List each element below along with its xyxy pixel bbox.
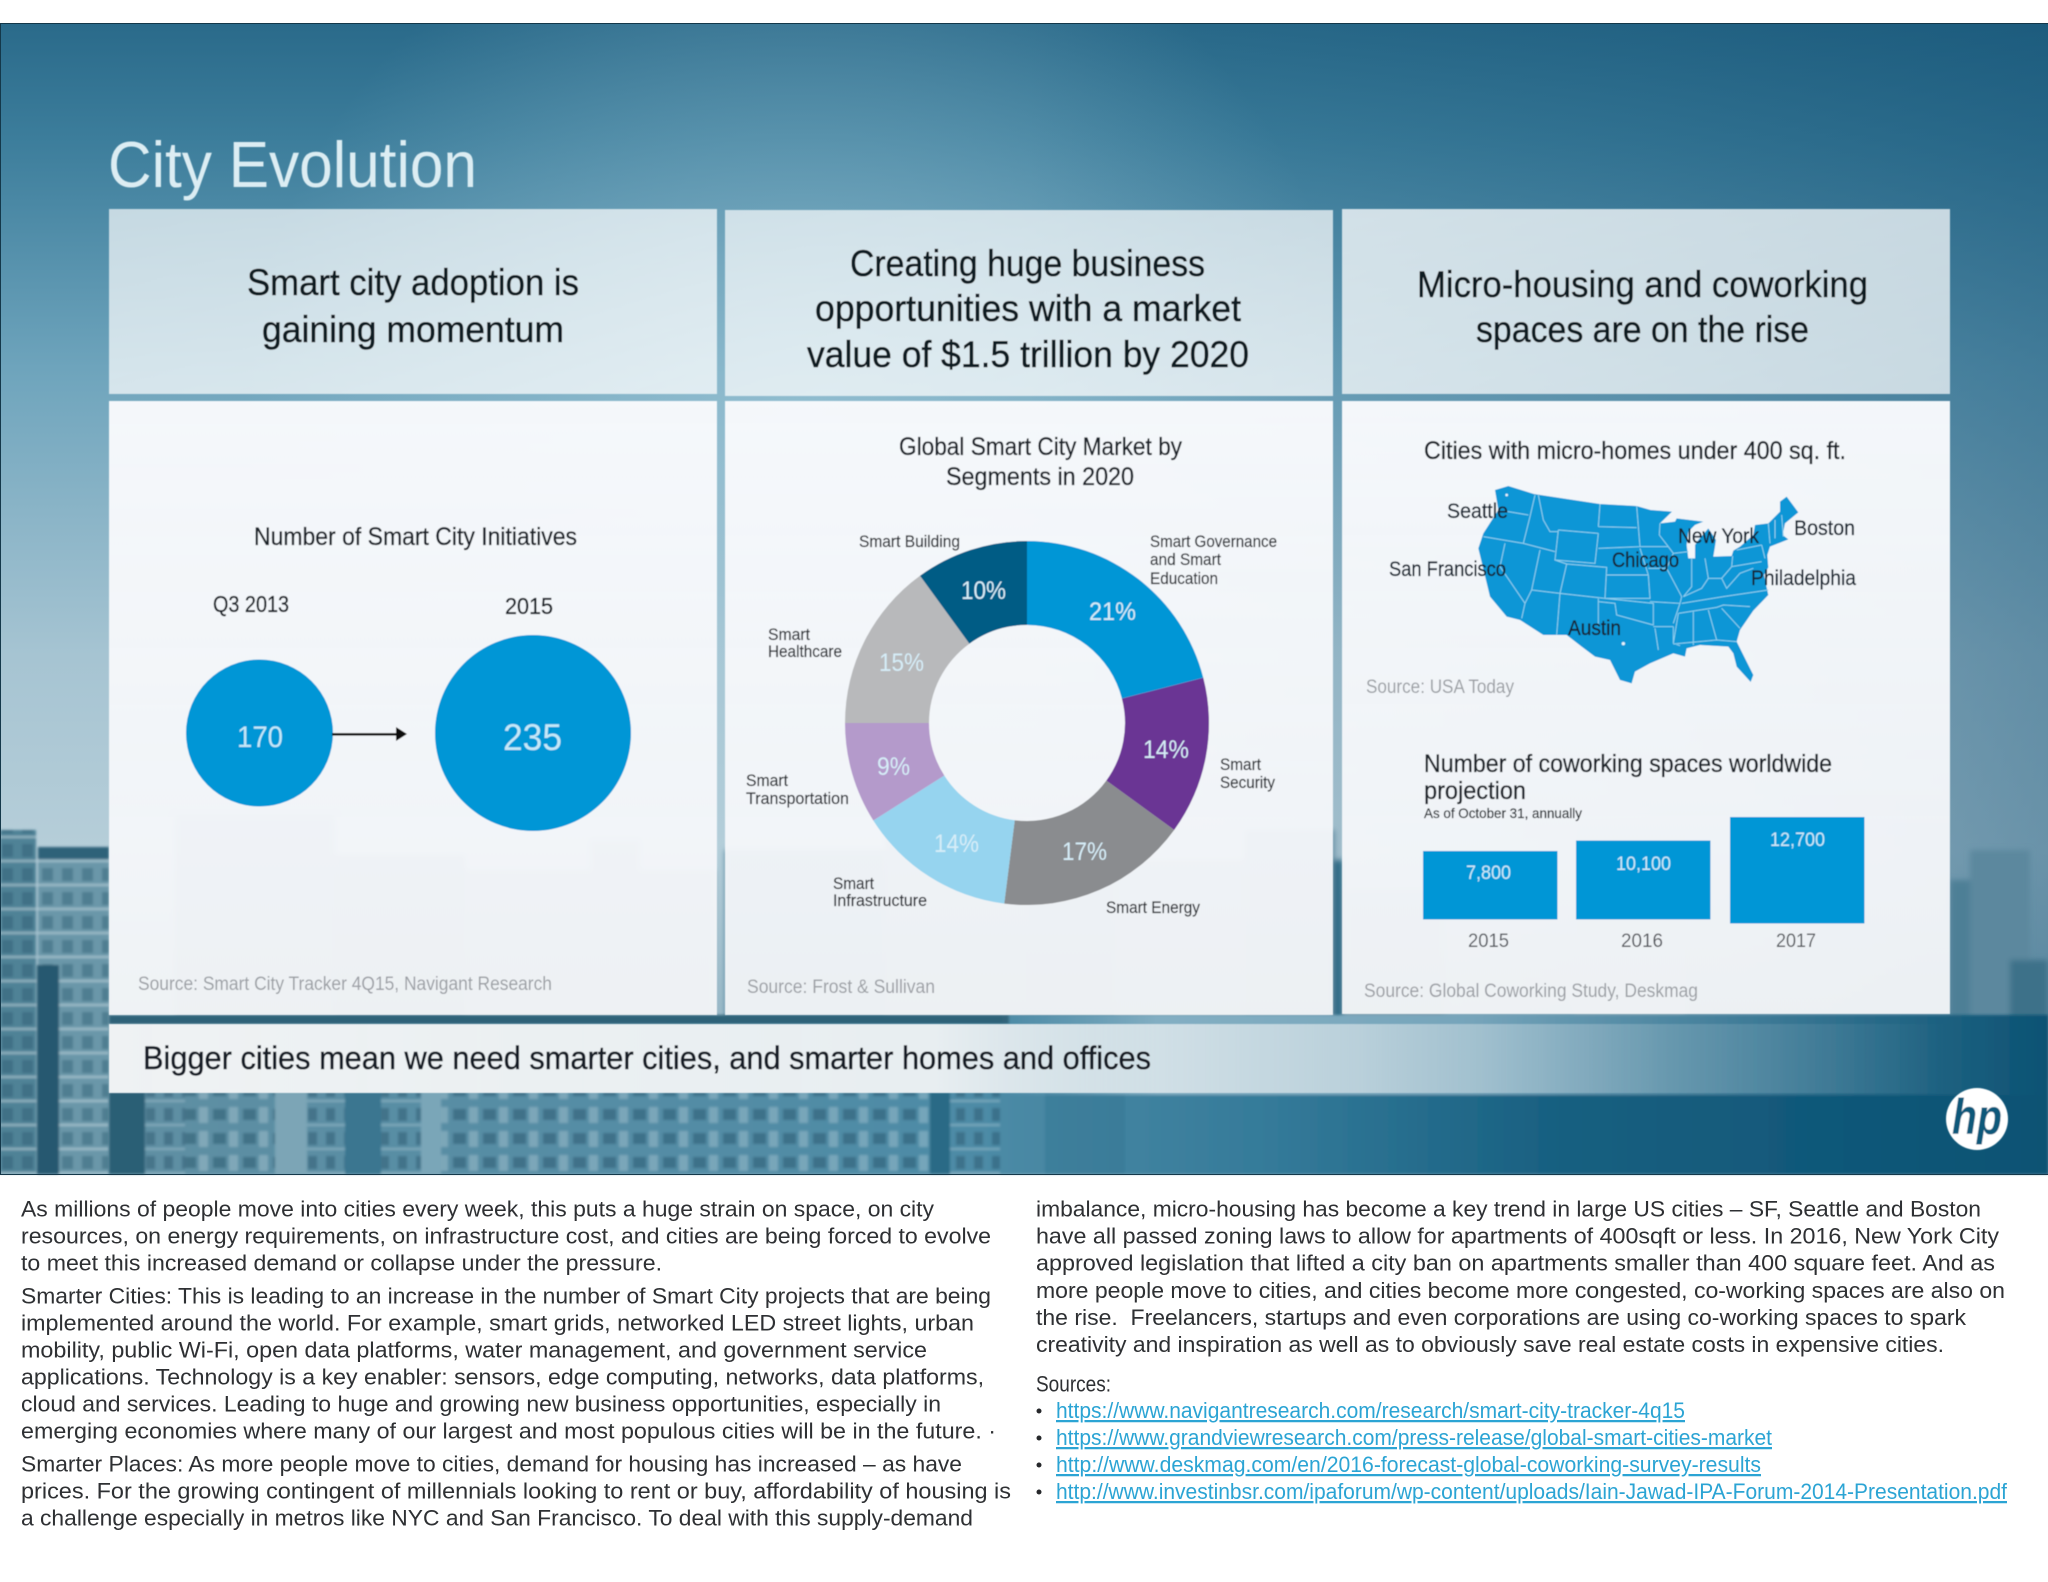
bar chart title: Number of coworking spaces worldwide bbox=[1424, 750, 1832, 778]
bar chart: coworking spaces: 7,800 bbox=[1466, 863, 1511, 884]
source: deskmag: Source: Global Coworking Study, Deskmag bbox=[1364, 981, 1698, 1002]
text block: right column: approved legislation that lifted a city ban on apartments smaller than 400 square feet. And as bbox=[1036, 1250, 1995, 1276]
heading: market: opportunities with a market bbox=[815, 288, 1242, 329]
bubble: 235: 235 bbox=[503, 717, 562, 758]
text block: right column bbox=[1036, 1196, 2005, 1357]
heading: adoption bbox=[247, 262, 579, 350]
donut chart: 10% bbox=[961, 577, 1006, 605]
bar chart: coworking spaces: 12,700 bbox=[1770, 830, 1825, 851]
donut chart: 17% bbox=[1062, 838, 1107, 866]
donut chart: 21% bbox=[1089, 598, 1136, 626]
heading: market: value of $1.5 trillion by 2020 bbox=[807, 334, 1249, 375]
text block: right column: more people move to cities, and cities become more congested, co-working spaces are also on bbox=[1036, 1278, 2005, 1303]
donut chart: 15% bbox=[879, 649, 924, 677]
heading: adoption: gaining momentum bbox=[262, 309, 564, 350]
map city labels: Seattle bbox=[1447, 500, 1508, 523]
text block: left column: to meet this increased demand or collapse under the pressure. bbox=[21, 1250, 662, 1276]
map title: Cities with micro-homes under 400 sq. ft. bbox=[1424, 437, 1846, 465]
text block: left column: emerging economies where many of our largest and most populous cities will be in the future. · bbox=[21, 1418, 996, 1444]
slide background bbox=[0, 23, 2048, 1174]
body card: market bbox=[725, 401, 1333, 1015]
sources list bbox=[1036, 1372, 2008, 1504]
sources list: https://www.navigantresearch.com/research/smart-city-tracker-4q15 bbox=[1056, 1398, 1685, 1423]
sources list: https://www.grandviewresearch.com/press-release/global-smart-cities-market bbox=[1056, 1425, 1773, 1450]
bar chart: coworking spaces: 2017 bbox=[1776, 931, 1816, 952]
bubble: 235 bbox=[435, 635, 631, 831]
bar chart title: projection bbox=[1424, 777, 1526, 805]
slide content group bbox=[108, 128, 2008, 1150]
donut chart: 14% bbox=[1143, 736, 1189, 764]
map city labels: Boston bbox=[1794, 517, 1855, 540]
bar chart title: As of October 31, annually bbox=[1424, 805, 1582, 821]
text block: left column: a challenge especially in metros like NYC and San Francisco. To deal with this supply-demand bbox=[21, 1506, 973, 1530]
text block: left column: Smarter Cities: This is leading to an increase in the number of Smart City projects that are being bbox=[21, 1284, 991, 1308]
sources list: http://www.investinbsr.com/ipaforum/wp-content/uploads/Iain-Jawad-IPA-Forum-2014-Presentation.pdf bbox=[1056, 1479, 2008, 1504]
chart title: segments: Segments in 2020 bbox=[946, 463, 1134, 491]
donut labels: Smart bbox=[746, 772, 788, 790]
heading: housing: spaces are on the rise bbox=[1476, 309, 1809, 350]
slide border lines bbox=[0, 23, 2048, 1175]
text block: right column: the rise. Freelancers, startups and even corporations are using co-working spaces to spark bbox=[1036, 1305, 1967, 1330]
donut labels: Smart Building bbox=[859, 533, 960, 551]
heading: adoption: Smart city adoption is bbox=[247, 262, 579, 303]
bar chart: coworking spaces bbox=[1423, 817, 1864, 952]
text block: left column bbox=[21, 1196, 1011, 1530]
donut labels: Smart Governance bbox=[1150, 533, 1277, 551]
donut labels: Transportation bbox=[746, 790, 849, 808]
map city labels bbox=[1389, 500, 1856, 640]
chart title: initiatives: Number of Smart City Initiatives bbox=[254, 523, 577, 551]
text block: left column: resources, on energy requirements, on infrastructure cost, and cities are being forced to evolve bbox=[21, 1224, 991, 1248]
map city labels: San Francisco bbox=[1389, 558, 1506, 581]
donut chart: 14% bbox=[934, 830, 979, 858]
bar chart: coworking spaces: 2016 bbox=[1621, 931, 1663, 952]
donut labels: Smart bbox=[1220, 756, 1261, 774]
panel: micro-housing bbox=[1342, 209, 1950, 1014]
source: frost: Source: Frost & Sullivan bbox=[747, 977, 935, 998]
bubble: 170 bbox=[186, 660, 333, 806]
heading: market: Creating huge business bbox=[850, 243, 1205, 284]
text block: right column: imbalance, micro-housing has become a key trend in large US cities – SF, Seattle and Boston bbox=[1036, 1196, 1981, 1222]
donut labels: Healthcare bbox=[768, 643, 842, 661]
bubble: 170: 170 bbox=[237, 721, 283, 754]
heading: housing bbox=[1417, 264, 1868, 350]
source: usa today: Source: USA Today bbox=[1366, 677, 1514, 698]
bar chart: coworking spaces: 2015 bbox=[1468, 931, 1509, 952]
heading: housing: Micro-housing and coworking bbox=[1417, 264, 1868, 305]
text block: left column: prices. For the growing contingent of millennials looking to rent or buy, affordability of housing is bbox=[21, 1478, 1011, 1504]
header card: housing bbox=[1342, 209, 1950, 394]
text block: left column: cloud and services. Leading to huge and growing new business opportunities, especially in bbox=[21, 1392, 941, 1416]
body card: adoption bbox=[109, 401, 717, 1015]
donut labels: Education bbox=[1150, 570, 1218, 588]
body card: housing bbox=[1342, 401, 1950, 1014]
label: 2015: 2015 bbox=[505, 593, 553, 619]
arrow bbox=[332, 727, 407, 741]
background: skyline floor strip bbox=[109, 1015, 2048, 1174]
title: City Evolution bbox=[108, 128, 477, 201]
text block: right column: have all passed zoning laws to allow for apartments of 400sqft or less. In 2016, New York City bbox=[1036, 1224, 2000, 1248]
map city labels: Chicago bbox=[1612, 549, 1679, 572]
donut labels: Infrastructure bbox=[833, 892, 927, 910]
donut chart bbox=[845, 541, 1209, 905]
text block: left column: mobility, public Wi-Fi, open data platforms, water management, and government service bbox=[21, 1338, 927, 1362]
sources list: Sources: bbox=[1036, 1372, 1111, 1396]
donut labels bbox=[746, 533, 1277, 917]
panel: smart city adoption bbox=[109, 209, 717, 1015]
donut labels: Smart bbox=[768, 626, 810, 644]
heading: market bbox=[807, 243, 1249, 375]
map: USA bbox=[1478, 486, 1798, 683]
map city labels: Philadelphia bbox=[1751, 567, 1856, 590]
source: navigant: Source: Smart City Tracker 4Q15, Navigant Research bbox=[138, 974, 552, 995]
map city labels: New York bbox=[1678, 525, 1759, 548]
donut labels: Smart bbox=[833, 875, 874, 893]
takeaway bar bbox=[109, 1024, 1948, 1093]
icon: hp logo: hp bbox=[1952, 1089, 2002, 1145]
donut labels: Security bbox=[1220, 774, 1276, 792]
header card: adoption bbox=[109, 209, 717, 394]
bar chart: coworking spaces: 10,100 bbox=[1616, 854, 1671, 875]
donut chart: 9% bbox=[877, 753, 910, 781]
chart title: segments bbox=[899, 433, 1182, 491]
panel: market opportunities bbox=[725, 210, 1333, 1015]
text block: left column: As millions of people move into cities every week, this puts a huge strain on space, on city bbox=[21, 1196, 935, 1222]
sources list: http://www.deskmag.com/en/2016-forecast-global-coworking-survey-results bbox=[1056, 1452, 1761, 1477]
donut labels: and Smart bbox=[1150, 551, 1221, 569]
text block: left column: Smarter Places: As more people move to cities, demand for housing has increased – as have bbox=[21, 1452, 962, 1476]
label: Q3 2013: Q3 2013 bbox=[213, 591, 289, 617]
chart title: segments: Global Smart City Market by bbox=[899, 433, 1182, 461]
text block: left column: applications. Technology is a key enabler: sensors, edge computing, networks, data platforms, bbox=[21, 1364, 984, 1390]
bar chart title bbox=[1424, 750, 1832, 821]
header card: market bbox=[725, 210, 1333, 396]
text block: right column: creativity and inspiration as well as to obviously save real estate costs in expensive cities. bbox=[1036, 1332, 1944, 1357]
takeaway bar: Bigger cities mean we need smarter cities, and smarter homes and offices bbox=[143, 1040, 1151, 1076]
donut labels: Smart Energy bbox=[1106, 899, 1201, 917]
map city labels: Austin bbox=[1568, 617, 1621, 640]
background: skyline towers on the left bbox=[0, 830, 109, 1174]
text block: left column: implemented around the world. For example, smart grids, networked LED street lights, urban bbox=[21, 1310, 974, 1336]
